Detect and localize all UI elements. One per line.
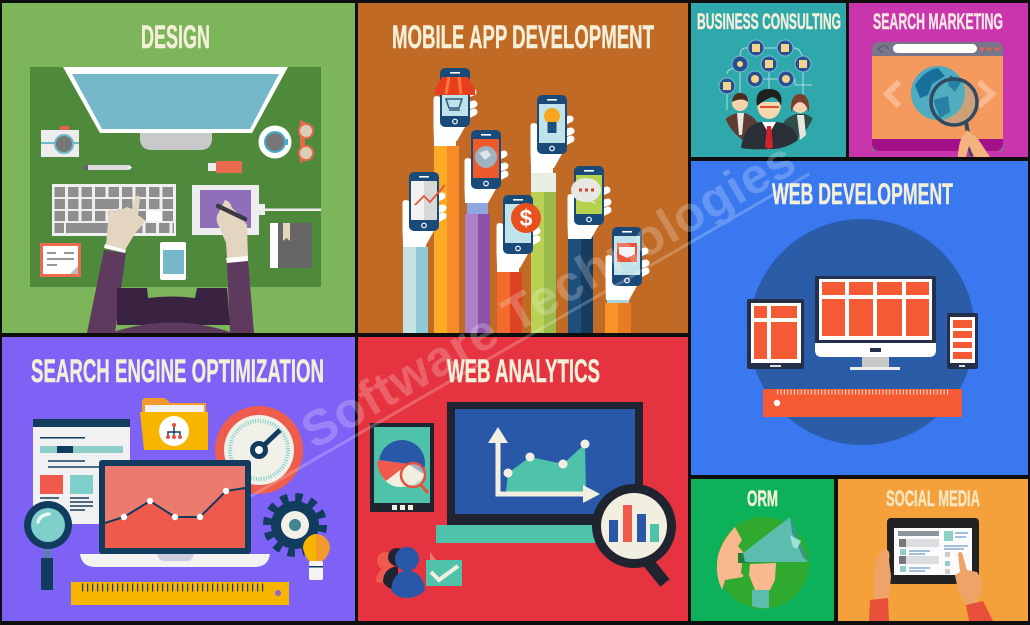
panel: web analytics: [358, 337, 688, 621]
illustration: designer desk: [30, 67, 321, 333]
watermark: Software Technologies: Software Technologies: [292, 131, 805, 459]
title: business consulting: BUSINESS CONSULTING: [697, 9, 841, 34]
panel: web development: [691, 161, 1028, 475]
title: web analytics: WEB ANALYTICS: [447, 353, 600, 389]
illustration: raised hands with phones: $: [520, 205, 533, 231]
panel: search marketing: [849, 3, 1028, 157]
panel: social media: [838, 479, 1028, 621]
title: ORM: ORM: [747, 486, 778, 511]
panel: mobile app development: [358, 3, 688, 333]
illustration: consultants and network icons: [719, 40, 816, 150]
panel: design: [2, 3, 355, 333]
illustration: browser with globe and magnifier: [872, 42, 1003, 157]
title: mobile app development: MOBILE APP DEVELOPMENT: [392, 19, 654, 55]
illustration: megaphone: [717, 517, 809, 609]
title: search engine optimization: SEARCH ENGINE OPTIMIZATION: [31, 353, 324, 389]
illustration: responsive devices on circle: [747, 219, 978, 445]
panel: ORM: [691, 479, 834, 621]
panel: business consulting: [691, 3, 846, 157]
illustration: SEO dashboard: [24, 398, 330, 605]
title: design: DESIGN: [141, 19, 210, 55]
illustration: analytics monitor: [370, 402, 676, 598]
illustration: tablet held by hands: [869, 518, 993, 621]
panel: search engine optimization: [2, 337, 355, 621]
illustration: raised hands with phones: [402, 68, 646, 333]
